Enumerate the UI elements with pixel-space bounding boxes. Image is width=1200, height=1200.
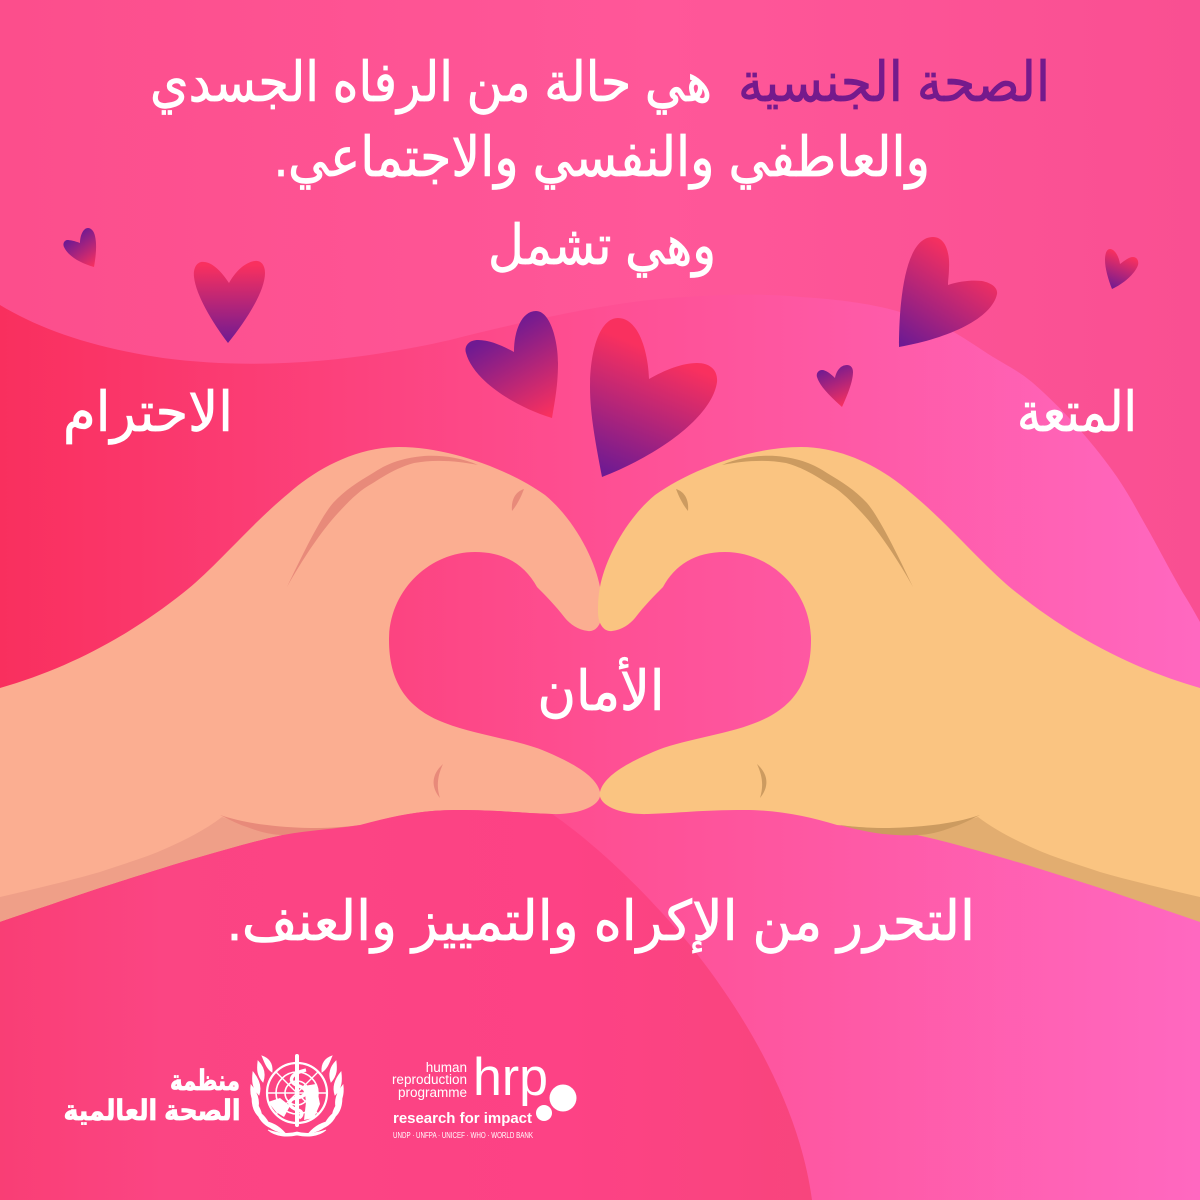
bottom statement: التحرر من الإكراه والتمييز والعنف. <box>227 890 975 954</box>
WHO name line 2: الصحة العالمية <box>64 1095 240 1126</box>
right knuckle crease bottom <box>757 764 766 798</box>
HRP letters: hrp <box>473 1048 548 1107</box>
WHO name line 1: منظمة <box>170 1065 240 1096</box>
left knuckle crease bottom <box>434 764 443 798</box>
subtitle: وهي تشمل <box>488 214 716 278</box>
right hand shape <box>598 447 1200 897</box>
HRP programme name: reproduction <box>392 1072 467 1087</box>
heart: small top left <box>63 228 96 267</box>
hand: right <box>598 447 1200 922</box>
left knuckle crease top <box>512 489 524 511</box>
heart: centre left <box>466 311 558 418</box>
right wrist crease <box>840 815 980 835</box>
icon: WHO emblem <box>251 1056 343 1136</box>
HRP programme name: human <box>426 1060 467 1075</box>
hand: left <box>0 447 602 922</box>
right arm shadow <box>840 812 1200 922</box>
left wrist crease <box>220 815 360 835</box>
heart: top left <box>194 261 265 343</box>
left thumb crease <box>287 456 478 587</box>
background: wave <box>0 295 1200 1200</box>
right thumb crease <box>722 456 913 587</box>
label: respect: الاحترام <box>63 381 233 444</box>
heart: small centre right <box>817 365 853 407</box>
HRP dots <box>536 1084 576 1121</box>
left hand shape <box>0 447 602 897</box>
title line 2: والعاطفي والنفسي والاجتماعي. <box>274 126 930 190</box>
heart: right large <box>899 237 997 347</box>
heart: centre large <box>590 318 717 477</box>
HRP programme name <box>392 1060 467 1100</box>
HRP partners: UNDP · UNFPA · UNICEF · WHO · WORLD BANK <box>393 1131 534 1140</box>
title line 1: remainder: هي حالة من الرفاه الجسدي <box>150 51 712 115</box>
left arm shadow <box>0 812 360 922</box>
label: pleasure: المتعة <box>1017 381 1137 443</box>
background: bottom left blob <box>0 810 812 1200</box>
heart: small top right <box>1105 249 1138 289</box>
HRP tagline: research for impact <box>393 1110 532 1127</box>
right knuckle crease top <box>676 489 688 511</box>
label: safety: الأمان <box>538 657 664 722</box>
logo: HRP <box>392 1048 576 1140</box>
WHO arabic name <box>64 1065 240 1126</box>
HRP programme name: programme <box>398 1085 467 1100</box>
title line 1: highlighted term: الصحة الجنسية <box>738 51 1050 113</box>
